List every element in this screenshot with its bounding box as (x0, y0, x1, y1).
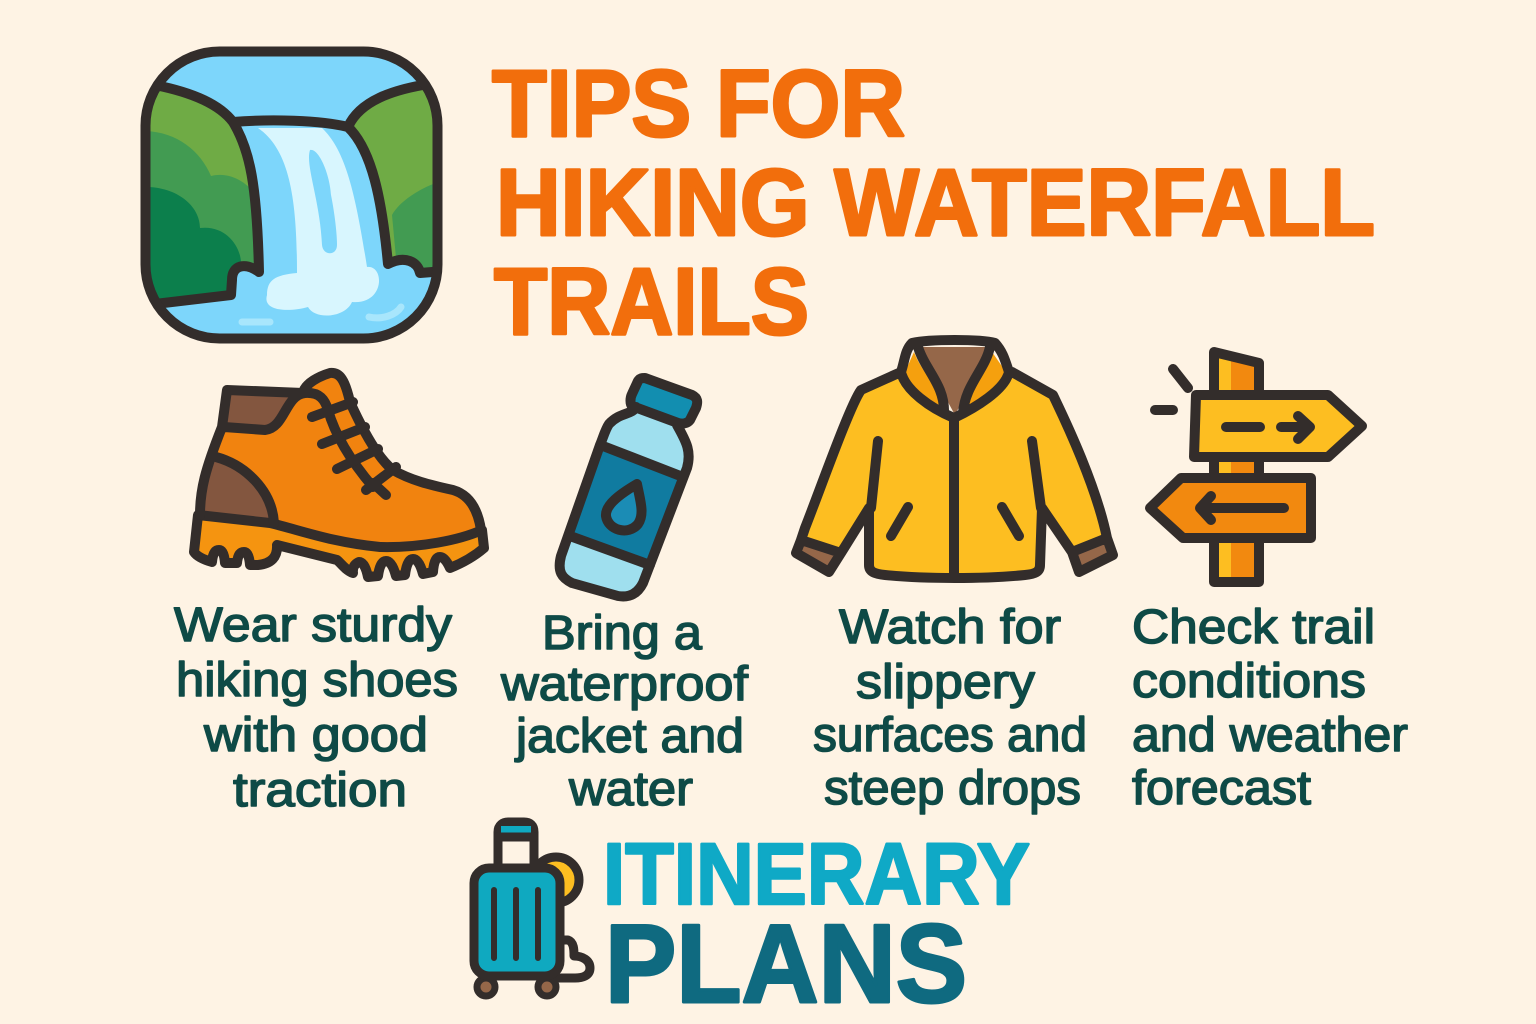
tip 2 text: waterproof (500, 658, 749, 711)
tip 4 text: forecast (1132, 762, 1311, 815)
bottle cap (630, 378, 697, 424)
bottle drop (606, 484, 642, 530)
icon: hiking boot (194, 373, 484, 577)
tip 4 text (1132, 601, 1408, 815)
tip 3 text (813, 601, 1087, 815)
jacket outline (796, 340, 1113, 578)
tip 3 text: surfaces and (813, 709, 1087, 762)
tip 1 text: traction (233, 764, 407, 817)
title (492, 51, 1375, 355)
bottle outline (560, 378, 697, 596)
suitcase ribs (494, 890, 538, 958)
tip 4 text: and weather (1132, 709, 1408, 762)
suitcase body (474, 868, 560, 976)
brand name: ITINERARY (603, 826, 1030, 923)
icon: trail signpost (1150, 352, 1362, 582)
tip 1 text: Wear sturdy (174, 599, 452, 652)
wheels (477, 978, 495, 996)
cloud (555, 940, 590, 978)
sign post (1215, 352, 1259, 582)
boot outline (200, 373, 481, 530)
jacket collar (905, 352, 1006, 413)
brand name: PLANS (605, 902, 967, 1024)
jacket cuffs (796, 538, 1113, 572)
left cliff (150, 91, 254, 298)
jacket lining (918, 347, 990, 415)
icon: yellow jacket (796, 340, 1113, 578)
handle (498, 822, 534, 866)
left arrow (1200, 496, 1284, 520)
boot sole (194, 515, 484, 577)
cliff outlines (155, 85, 445, 304)
tip 2 text: jacket and (514, 710, 744, 763)
tip 1 text: hiking shoes (176, 654, 458, 707)
bottle label (566, 444, 684, 566)
boot collar patch (222, 390, 292, 428)
brand name (603, 826, 1030, 1024)
lower sign board (1150, 478, 1311, 538)
right cliff (354, 90, 432, 268)
tip 1 text: with good (203, 709, 428, 762)
tip 1 text (174, 599, 458, 817)
upper sign board (1194, 395, 1362, 457)
waterfall frame (146, 52, 438, 338)
tip 2 text (500, 607, 749, 816)
tip 2 text: water (568, 763, 693, 816)
icon: waterfall (140, 51, 445, 339)
tip 2 text: Bring a (542, 607, 702, 660)
tip 3 text: steep drops (824, 762, 1081, 815)
sun (533, 857, 579, 903)
title: TRAILS (494, 249, 809, 355)
tip 3 text: slippery (856, 656, 1035, 709)
boot laces (312, 402, 396, 495)
waterfall stream (242, 128, 401, 322)
tip 3 text: Watch for (839, 601, 1061, 654)
title: TIPS FOR (492, 51, 905, 157)
tip 4 text: conditions (1132, 655, 1366, 708)
icon: suitcase logo (474, 822, 590, 996)
right arrow (1226, 416, 1310, 439)
boot heel patch (200, 457, 273, 523)
title: HIKING WATERFALL (496, 150, 1375, 256)
tip 4 text: Check trail (1132, 601, 1375, 654)
icon: water bottle (560, 378, 697, 596)
signal ticks (1155, 369, 1188, 410)
